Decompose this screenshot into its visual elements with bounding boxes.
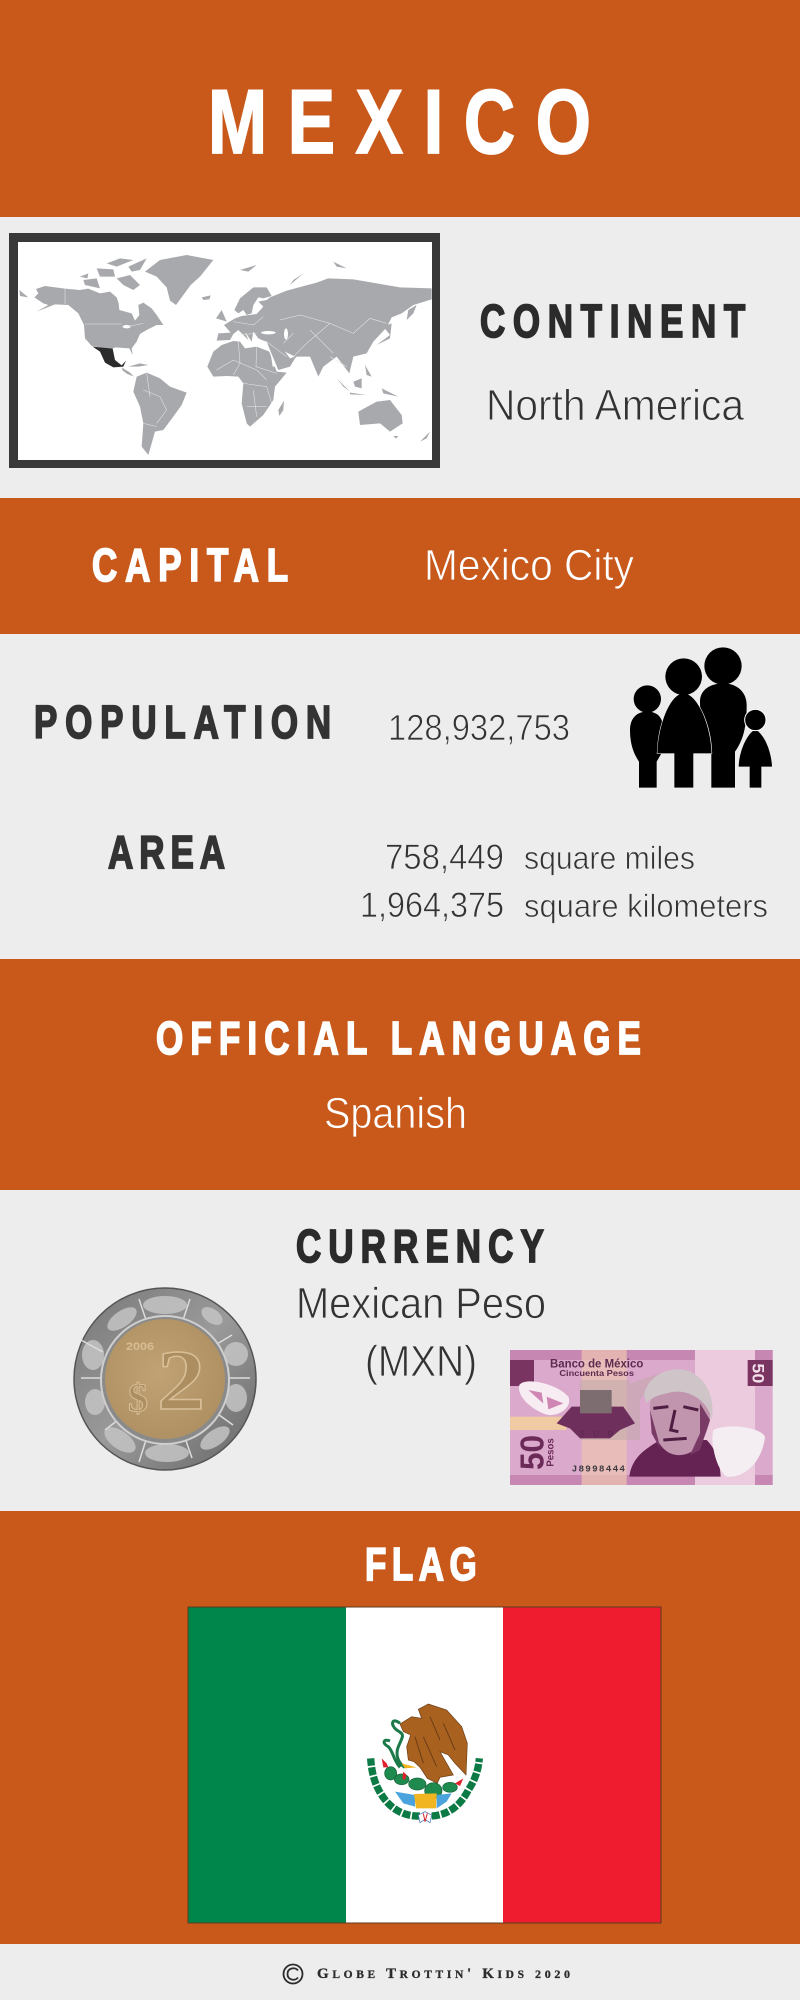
icon: coin xyxy=(74,1288,256,1470)
panel: title band xyxy=(0,0,800,217)
panel: official language xyxy=(0,959,800,1190)
icon: family xyxy=(630,647,772,788)
population heading: POPULATION xyxy=(34,696,331,748)
panel: footer credit xyxy=(284,1964,570,1984)
icon: banknote: J8998444 xyxy=(572,1464,625,1475)
south america xyxy=(133,373,187,455)
icon: banknote: 50 xyxy=(514,1435,551,1470)
flag of mexico xyxy=(188,1607,661,1923)
area values: 1,964,375 xyxy=(360,886,504,925)
language value: Spanish xyxy=(324,1089,467,1138)
world map xyxy=(9,233,440,468)
area heading: AREA xyxy=(108,826,225,878)
area values: square kilometers xyxy=(524,888,768,924)
icon: banknote: Banco de México xyxy=(550,1356,643,1370)
currency value: Mexican Peso xyxy=(296,1279,546,1328)
footer text: G LOBE T ROTTIN' K IDS 2020 xyxy=(317,1966,570,1982)
icon: copyright xyxy=(284,1964,302,1984)
eagle wing and body xyxy=(400,1704,467,1783)
area values xyxy=(360,838,768,925)
wreath xyxy=(371,1758,420,1816)
icon: coin: 2 xyxy=(157,1332,205,1428)
australia xyxy=(358,400,430,442)
snake xyxy=(384,1721,405,1767)
continent heading: CONTINENT xyxy=(480,295,745,347)
title: MEXICO xyxy=(208,72,591,173)
icon: banknote: Pesos xyxy=(545,1438,556,1467)
icon: coin: 2006 xyxy=(126,1341,154,1353)
mexico highlight xyxy=(93,347,126,367)
cactus xyxy=(385,1767,457,1799)
icon: banknote: SUD xyxy=(580,1429,613,1439)
capital heading: CAPITAL xyxy=(92,539,288,591)
icon: banknote xyxy=(510,1350,773,1485)
indonesia xyxy=(337,365,398,397)
currency value: (MXN) xyxy=(365,1337,477,1386)
panel: population and area xyxy=(34,647,772,925)
icon: coin: $ xyxy=(128,1375,148,1420)
icon: banknote: 50 xyxy=(749,1363,768,1383)
panel: continent xyxy=(9,233,745,468)
language heading: OFFICIAL LANGUAGE xyxy=(156,1012,641,1064)
icon: banknote: Cincuenta Pesos xyxy=(559,1368,634,1378)
pedestal xyxy=(395,1792,452,1808)
ribbon xyxy=(418,1812,432,1823)
north america xyxy=(19,286,163,355)
panel: flag xyxy=(0,1511,800,1944)
currency heading: CURRENCY xyxy=(296,1220,544,1272)
africa xyxy=(207,341,287,427)
capital value: Mexico City xyxy=(424,541,634,590)
greenland xyxy=(145,255,213,305)
population value: 128,932,753 xyxy=(388,707,570,748)
continent value: North America xyxy=(486,381,744,430)
eurasia xyxy=(217,278,432,377)
panel: capital xyxy=(0,498,800,634)
inland seas xyxy=(123,325,295,367)
caribbean and central america xyxy=(122,363,148,377)
flag heading: FLAG xyxy=(365,1538,477,1590)
panel: currency xyxy=(74,1220,773,1485)
currency value xyxy=(296,1279,546,1386)
area values: 758,449 xyxy=(385,838,504,877)
area values: square miles xyxy=(524,840,695,876)
scandinavia xyxy=(234,287,272,315)
icon: coat of arms xyxy=(371,1704,479,1823)
